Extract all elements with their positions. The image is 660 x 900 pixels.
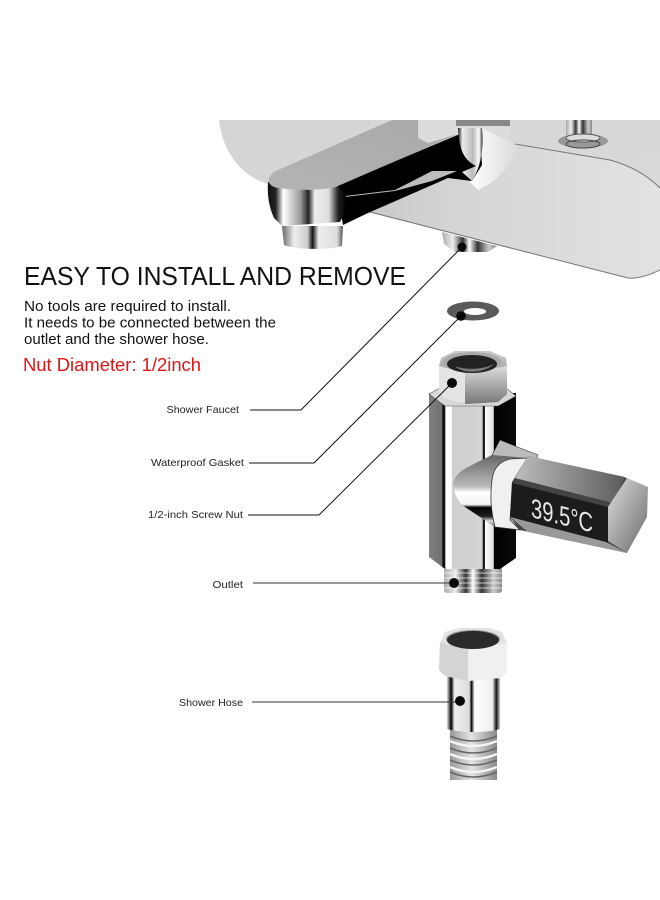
- arm neck: [492, 440, 538, 470]
- temperature readout: 39.5°C: [531, 492, 593, 538]
- upper knob: [558, 120, 608, 148]
- description text: It needs to be connected between the: [24, 316, 276, 332]
- end cap: [608, 478, 648, 553]
- spout head: [268, 182, 346, 226]
- side arm: [453, 455, 528, 530]
- display panel: [510, 483, 608, 543]
- hose nut: [439, 628, 507, 681]
- gasket: [447, 302, 499, 320]
- callout: screw nut: 1/2-inch Screw Nut: [148, 509, 243, 521]
- spout arm: [336, 134, 482, 225]
- nut diameter note: Nut Diameter: 1/2inch: [23, 355, 201, 375]
- callout: screw nut: [148, 378, 457, 521]
- callout: outlet: [212, 578, 459, 591]
- spout nozzle: [282, 226, 343, 249]
- callout: shower faucet: Shower Faucet: [166, 404, 239, 416]
- title: EASY TO INSTALL AND REMOVE: [24, 263, 406, 291]
- callout: shower hose: [179, 696, 465, 709]
- arm collar band: [491, 458, 528, 530]
- description text: [24, 299, 276, 348]
- top nut: [439, 351, 507, 404]
- housing backing: [510, 456, 627, 553]
- callout: shower faucet: [166, 242, 466, 416]
- callout: outlet: Outlet: [212, 579, 243, 591]
- hose ferrule: [447, 676, 500, 732]
- wall plate: [219, 120, 660, 278]
- front plate gloss: [470, 128, 520, 190]
- arm reflection: [345, 171, 457, 197]
- faucet illustration: [219, 120, 660, 278]
- outlet thread: [444, 567, 502, 593]
- callout: waterproof gasket: [151, 311, 466, 469]
- callout: waterproof gasket: Waterproof Gasket: [151, 457, 244, 469]
- shower hose illustration: [439, 628, 507, 780]
- central block: [418, 120, 510, 143]
- description text: outlet and the shower hose.: [24, 332, 209, 348]
- description text: No tools are required to install.: [24, 299, 231, 315]
- lower connector: [442, 232, 497, 252]
- thermometer illustration: [429, 351, 648, 593]
- front plate: [370, 128, 660, 278]
- display housing: [515, 456, 625, 503]
- column collar: [429, 388, 516, 406]
- callout: shower hose: Shower Hose: [179, 697, 243, 709]
- main column: [429, 393, 516, 569]
- spout top face: [269, 120, 458, 190]
- riser: [458, 128, 483, 181]
- metal hose: [450, 730, 497, 780]
